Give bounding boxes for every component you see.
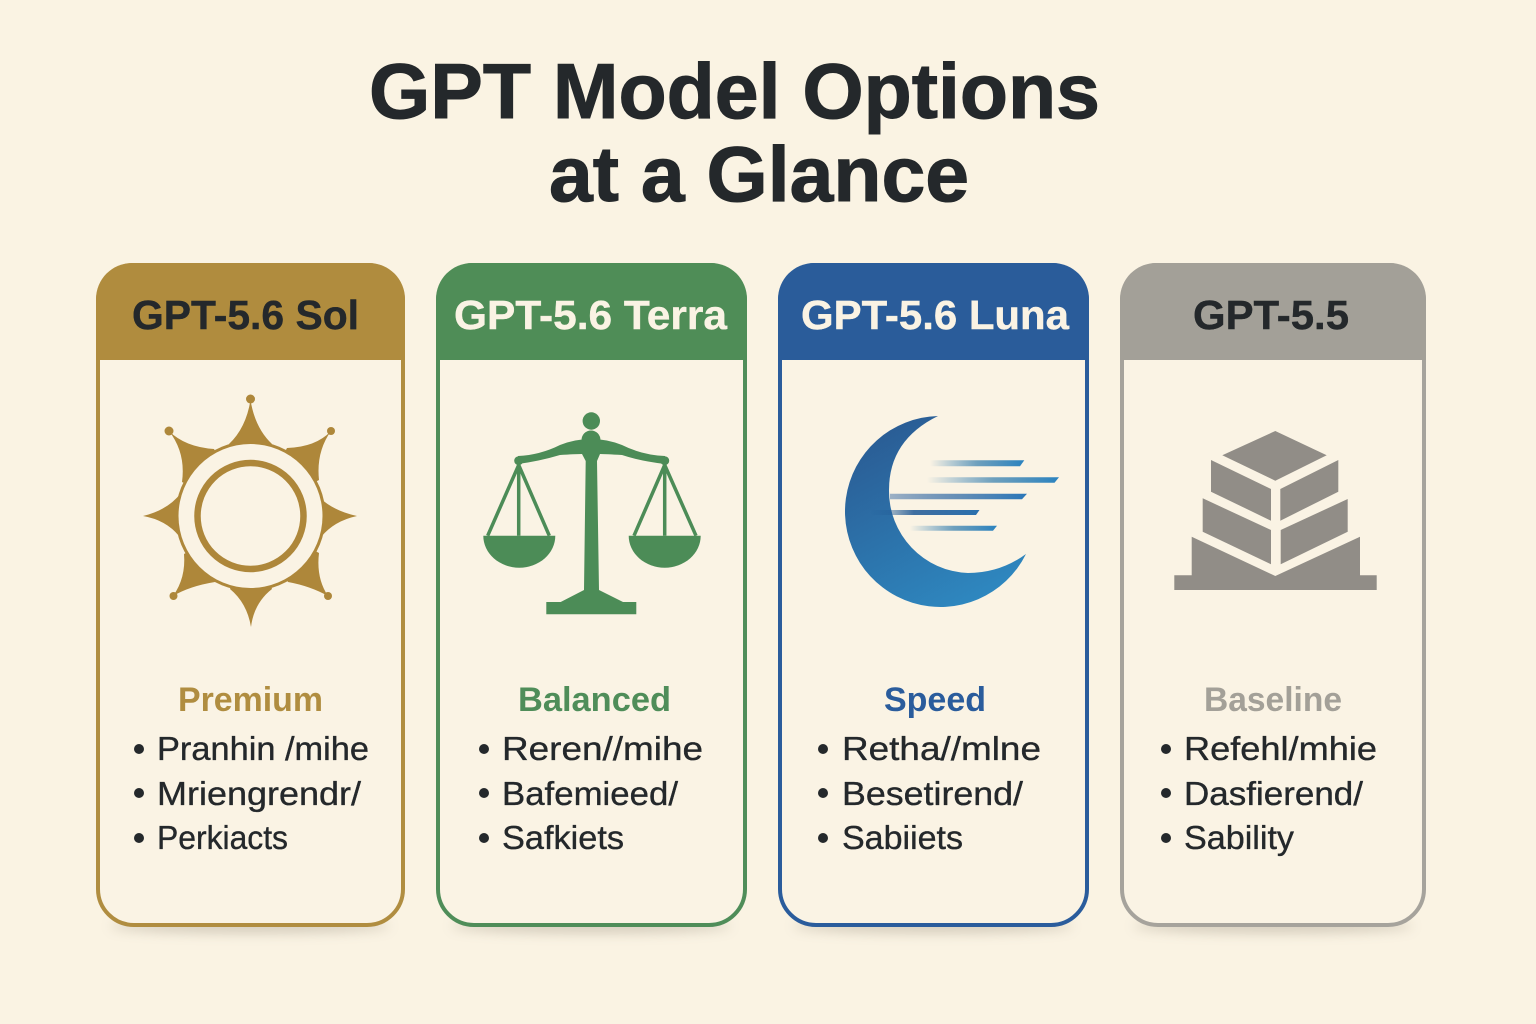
header label: GPT-5.6 Terra xyxy=(454,292,728,338)
feature list xyxy=(479,730,703,856)
feature list: Reren//mihe xyxy=(502,730,703,767)
tier label: Premium xyxy=(178,681,323,719)
icon: stacked blocks xyxy=(1174,431,1377,590)
feature list: Sabiiets xyxy=(842,819,963,856)
header label: GPT-5.6 Luna xyxy=(801,292,1070,338)
panel: GPT-5.5 xyxy=(1120,263,1426,925)
icon: balance scales xyxy=(483,412,701,614)
feature list xyxy=(1161,730,1377,856)
feature list: Safkiets xyxy=(502,819,624,856)
card outline xyxy=(438,265,745,925)
feature list: Sability xyxy=(1184,819,1295,856)
feature list xyxy=(818,730,1041,856)
card outline xyxy=(780,265,1087,925)
title xyxy=(369,47,1100,218)
card outline xyxy=(98,265,403,925)
title: at a Glance xyxy=(549,130,969,218)
header band xyxy=(96,263,405,360)
icon: sun xyxy=(143,394,357,627)
feature list: Perkiacts xyxy=(157,819,288,856)
panel: GPT-5.6 Sol xyxy=(96,263,405,925)
tier label: Balanced xyxy=(518,681,671,719)
header label: GPT-5.6 Sol xyxy=(132,292,359,338)
header band xyxy=(436,263,747,360)
feature list: Dasfierend/ xyxy=(1184,775,1364,812)
panel: GPT-5.6 Luna xyxy=(778,263,1089,925)
feature list: Mriengrendr/ xyxy=(157,775,362,812)
header band xyxy=(778,263,1089,360)
panel: GPT-5.6 Terra xyxy=(436,263,747,925)
icon: crescent moon with speed lines xyxy=(845,416,1059,607)
card outline xyxy=(1122,265,1424,925)
header band xyxy=(1120,263,1426,360)
feature list: Bafemieed/ xyxy=(502,775,679,812)
title: GPT Model Options xyxy=(369,47,1100,135)
feature list: Pranhin /mihe xyxy=(157,730,369,767)
feature list xyxy=(134,730,369,856)
feature list: Retha//mlne xyxy=(842,730,1041,767)
feature list: Besetirend/ xyxy=(842,775,1024,812)
feature list: Refehl/mhie xyxy=(1184,730,1377,767)
tier label: Speed xyxy=(884,681,986,719)
header label: GPT-5.5 xyxy=(1193,292,1349,338)
tier label: Baseline xyxy=(1204,681,1342,719)
